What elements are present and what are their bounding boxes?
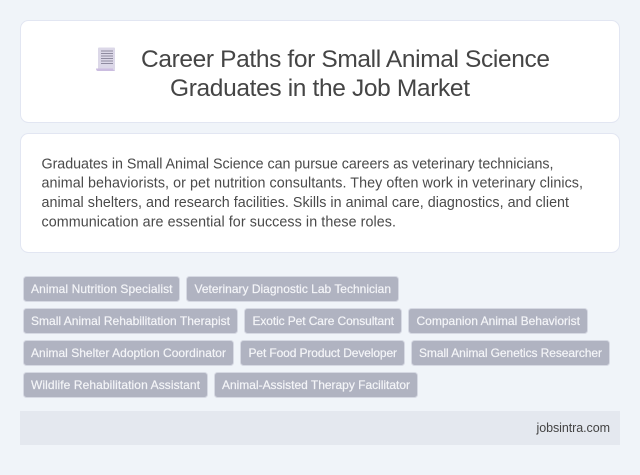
tag: Small Animal Rehabilitation Therapist [24,308,238,334]
text block: description [42,156,583,230]
footer text: source: jobsintra.com [536,421,610,435]
tag: Small Animal Genetics Researcher [412,340,610,366]
tag: Animal Nutrition Specialist [24,276,180,302]
text block: description: communication are essential for success in these roles. [42,214,396,230]
text block: description: Graduates in Small Animal Science can pursue careers as veterinary technicians, [42,156,554,172]
panel: description card [20,134,620,252]
footer bar [20,411,620,445]
panel: header card [20,20,620,122]
title: Graduates in the Job Market [170,75,470,102]
tag: Exotic Pet Care Consultant: Exotic Pet Care Consultant [252,314,395,328]
tag: Animal-Assisted Therapy Facilitator: Animal-Assisted Therapy Facilitator [222,378,410,392]
tag: Companion Animal Behaviorist [408,308,588,334]
tag: Small Animal Genetics Researcher: Small Animal Genetics Researcher [419,346,602,360]
tag: Companion Animal Behaviorist: Companion Animal Behaviorist [416,314,581,328]
tag: Veterinary Diagnostic Lab Technician: Veterinary Diagnostic Lab Technician [194,282,391,296]
tag: Animal Nutrition Specialist: Animal Nutrition Specialist [31,282,173,296]
tag: Small Animal Rehabilitation Therapist: Small Animal Rehabilitation Therapist [31,314,231,328]
tag list: career paths [24,276,610,398]
tag: Wildlife Rehabilitation Assistant [24,372,208,398]
tag: Animal-Assisted Therapy Facilitator [214,372,418,398]
tag: Animal Shelter Adoption Coordinator [24,340,234,366]
tag: Pet Food Product Developer: Pet Food Product Developer [248,346,397,360]
tag: Wildlife Rehabilitation Assistant: Wildlife Rehabilitation Assistant [31,378,201,392]
tag: Veterinary Diagnostic Lab Technician [186,276,398,302]
tag: Exotic Pet Care Consultant [244,308,402,334]
title [141,46,550,102]
tag: Pet Food Product Developer [240,340,404,366]
tag: Animal Shelter Adoption Coordinator: Animal Shelter Adoption Coordinator [31,346,226,360]
text block: description: animal behaviorists, or pet nutrition consultants. They often work in veterinary clinics, [42,176,583,192]
title: Career Paths for Small Animal Science [141,46,550,73]
icon: document scroll [96,48,115,71]
text block: description: animal shelters, and research facilities. Skills in animal care, diagnostics, and client [42,195,569,211]
